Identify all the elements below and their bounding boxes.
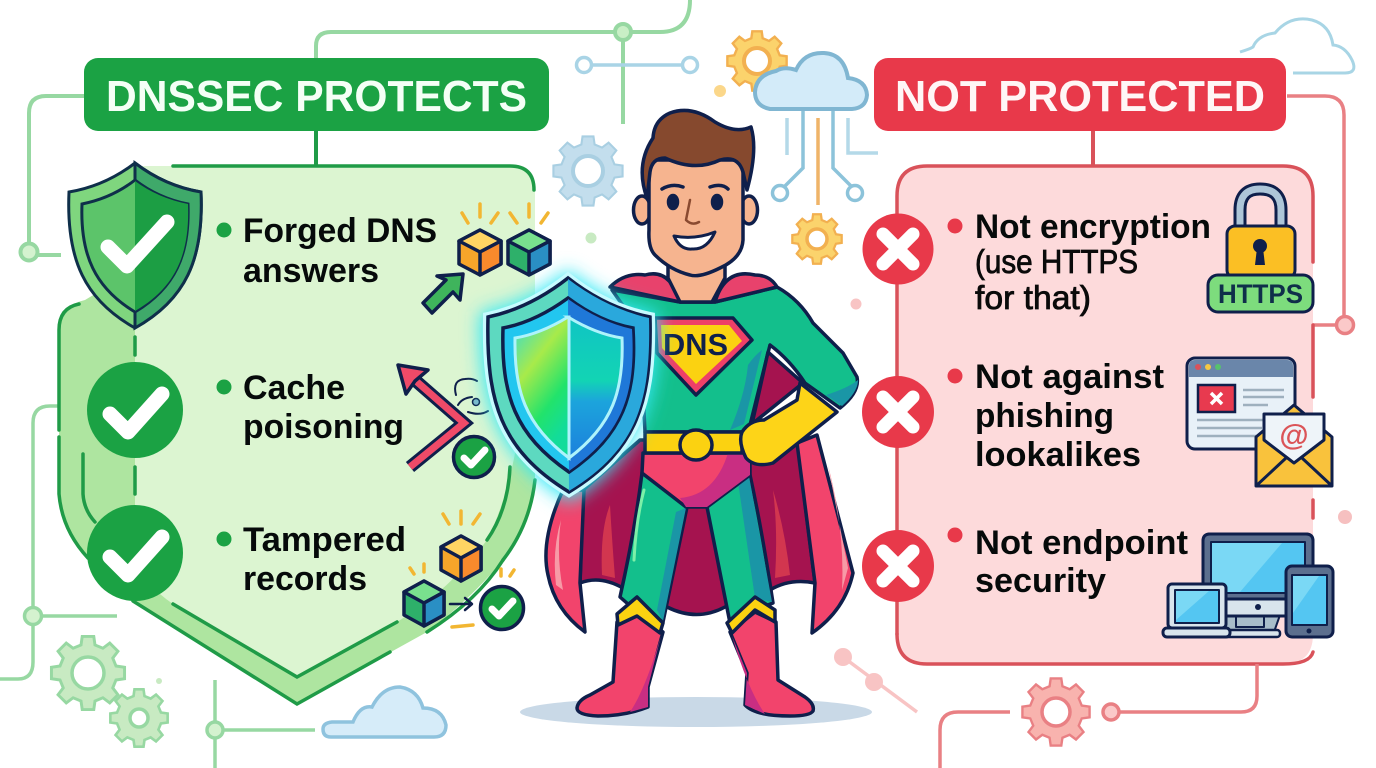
icon: cubes tampered [404, 511, 524, 630]
shield inner [515, 317, 569, 458]
connector: green heading to panel [314, 131, 318, 166]
hero collar [610, 274, 777, 302]
hero emblem [655, 318, 752, 395]
big shield [480, 270, 658, 502]
dot: yellow [714, 85, 726, 97]
item: not against phishing lookalikes: lookalikes [975, 436, 1141, 474]
item: not against phishing lookalikes [948, 358, 1164, 474]
item: not encryption: for that) [975, 279, 1091, 316]
cloud network lines [772, 110, 878, 205]
icon: email envelope [1256, 405, 1332, 486]
heading: DNSSEC PROTECTS: DNSSEC PROTECTS [106, 72, 527, 121]
item: not endpoint security: security [975, 562, 1106, 600]
hero mouth [674, 232, 715, 249]
icon: red x 3 [862, 530, 934, 602]
icon: browser warning [1187, 358, 1295, 449]
hero emblem: DNS [663, 327, 728, 362]
item: not against phishing lookalikes: phishing [975, 397, 1114, 435]
item: not encryption: (use HTTPS [975, 243, 1138, 280]
shield middle [503, 298, 634, 472]
item: cache poisoning: poisoning [243, 408, 404, 446]
shield outer [488, 278, 650, 492]
dot: pink right [1338, 510, 1352, 524]
item: forged DNS answers [216, 212, 437, 290]
heading: DNSSEC PROTECTS [84, 58, 549, 131]
icon: red x 1 [862, 214, 934, 284]
dot: green small [156, 678, 162, 684]
hero belt [645, 430, 742, 460]
item: cache poisoning [216, 369, 404, 446]
tablet [1286, 566, 1333, 637]
gear: red [1022, 678, 1090, 746]
item: forged DNS answers: Forged DNS [243, 212, 437, 250]
circuit lines: red bottom [940, 664, 1257, 768]
heading: NOT PROTECTED [874, 58, 1286, 131]
circuit lines: green bottom [207, 680, 315, 768]
item: not against phishing lookalikes: Not against [975, 358, 1164, 396]
icon: email envelope: @ [1279, 419, 1309, 452]
heading: NOT PROTECTED: NOT PROTECTED [895, 72, 1265, 121]
icon: HTTPS lock: HTTPS [1218, 279, 1303, 309]
panel band [59, 166, 535, 704]
shield glow [480, 270, 658, 502]
laptop [1163, 584, 1230, 637]
hero neck [668, 262, 725, 302]
item: not encryption: Not encryption [975, 208, 1211, 246]
icon: red arrow and check [398, 365, 494, 478]
hero boots [577, 597, 813, 716]
hero glove [741, 383, 837, 465]
gear: green small [110, 689, 168, 747]
pink connector [834, 648, 917, 712]
ground shadow [520, 697, 872, 727]
item: forged DNS answers: answers [243, 252, 379, 290]
hero cape under arm [752, 352, 803, 424]
icon: cubes forged [423, 204, 550, 313]
icon: green shield check [69, 163, 201, 328]
connector: red heading to panel [1091, 131, 1095, 166]
icon: HTTPS lock [1208, 189, 1313, 312]
hero ears [634, 196, 758, 224]
hero briefs [642, 453, 750, 507]
item: not endpoint security [948, 524, 1188, 600]
gear: gold top [727, 31, 787, 91]
panel inner [135, 166, 535, 677]
icon: devices [1163, 534, 1333, 637]
dot: pink centre [850, 298, 862, 310]
item: not endpoint security: Not endpoint [975, 524, 1188, 562]
cloud: top right outline [1240, 19, 1354, 73]
item: not encryption [948, 208, 1211, 316]
hero cape [546, 435, 853, 633]
gear: gold lower [792, 214, 842, 264]
panel: not protected [897, 166, 1313, 664]
hero torso and arm [612, 287, 857, 432]
hero [546, 110, 858, 716]
icon: green check 3 [87, 505, 183, 601]
circuit lines: green left upper [20, 96, 84, 260]
monitor [1203, 534, 1313, 637]
dot: green centre [586, 232, 596, 244]
item: tampered records: records [243, 560, 367, 598]
gear: blue [553, 136, 623, 206]
item: cache poisoning: Cache [243, 369, 345, 407]
panel outlines [897, 166, 1313, 664]
icon: red x 2 [862, 376, 934, 448]
panel outlines [59, 166, 535, 704]
hero hair [642, 110, 754, 198]
hero eyes brows nose [662, 185, 728, 224]
circuit lines: green left lower [0, 406, 117, 679]
cloud: top centre [755, 53, 867, 109]
item: tampered records: Tampered [243, 521, 406, 559]
gear: green large [51, 636, 125, 710]
icon: green check 2 [87, 362, 183, 458]
item: tampered records [216, 521, 406, 598]
hero face [649, 160, 743, 276]
circuit lines: red upper [1287, 96, 1354, 334]
hero legs [620, 473, 773, 623]
hero torso shading [730, 350, 858, 430]
cloud: bottom [323, 687, 446, 737]
panel: DNSSEC protects [59, 166, 535, 704]
circuit lines: green top [316, 0, 690, 124]
circuit lines: blue top [576, 58, 698, 72]
